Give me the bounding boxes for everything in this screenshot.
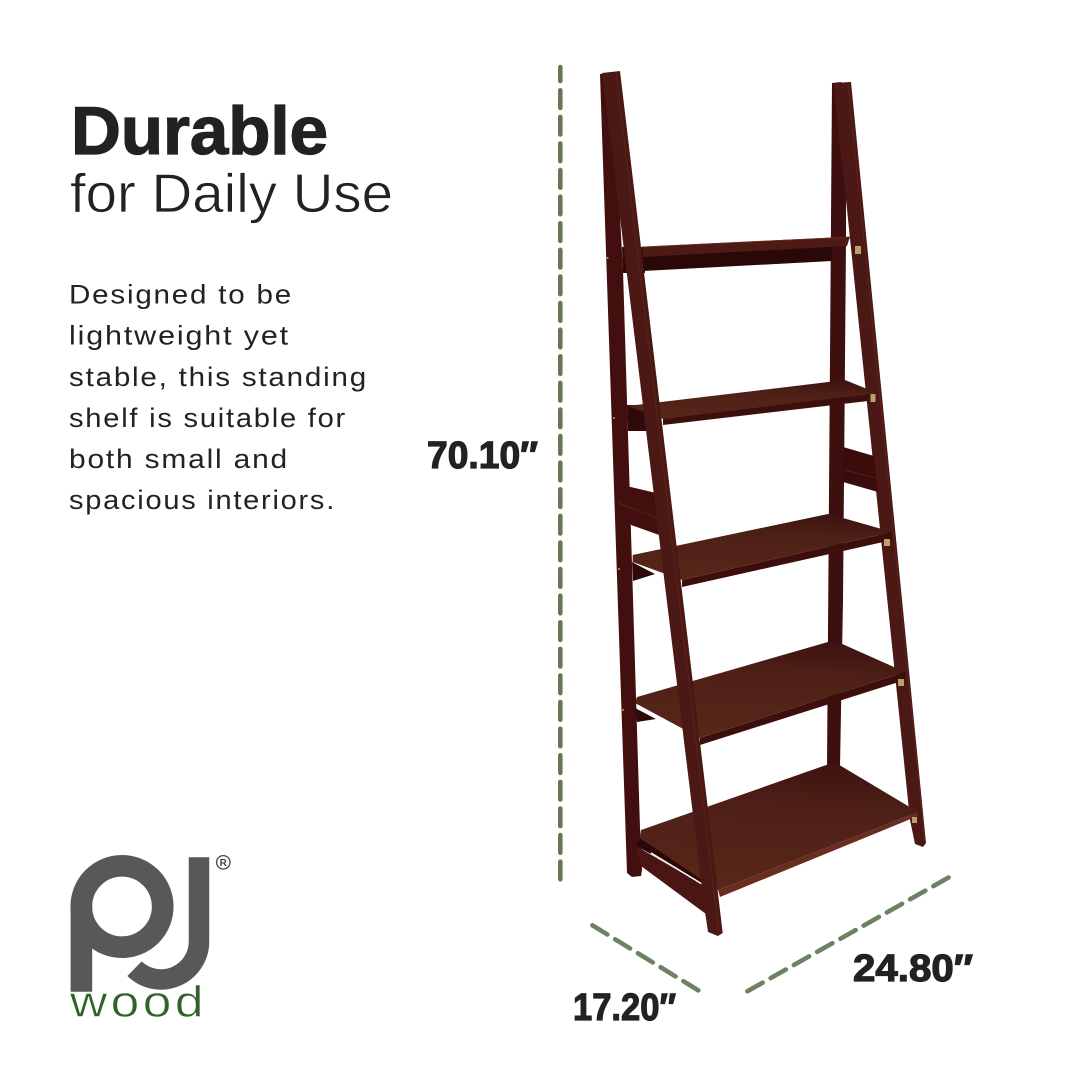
shelf 4: [635, 642, 905, 745]
depth dimension line: [592, 925, 699, 991]
description text block: spacious interiors.: [69, 485, 336, 515]
depth label: 17.20″: [573, 987, 676, 1029]
left upper brace: [622, 247, 645, 273]
description text block: [69, 280, 368, 515]
logo: letter p: [81, 866, 163, 992]
left back leg: [600, 73, 642, 877]
right back leg: [827, 82, 846, 767]
logo: registered mark: R: [220, 858, 228, 869]
gold brackets: [606, 246, 917, 823]
logo: letter j: [134, 857, 199, 979]
title: light line: for Daily Use: [70, 162, 393, 224]
width dimension line: [747, 877, 949, 991]
description text block: shelf is suitable for: [69, 403, 347, 433]
brand logo: [69, 856, 230, 1026]
width label: 24.80″: [853, 948, 973, 990]
title: bold line: Durable: [71, 93, 328, 169]
description text block: stable, this standing: [69, 362, 368, 392]
description text block: both small and: [69, 444, 289, 474]
right cross brace: [843, 447, 878, 492]
shelf 5: [636, 763, 918, 897]
height label: 70.10″: [427, 435, 538, 477]
left front rail: [602, 71, 723, 936]
description text block: lightweight yet: [69, 320, 290, 350]
shelf 1: [642, 237, 850, 271]
left second brace: [627, 405, 655, 431]
left brace under shelf 4: [635, 708, 656, 722]
shelf 3: [633, 514, 892, 587]
logo: registered mark: [217, 856, 230, 869]
description text block: Designed to be: [69, 280, 293, 310]
title: [70, 93, 393, 224]
ladder shelf product: [600, 71, 926, 936]
left third brace: [618, 484, 662, 536]
bottom side rail: [636, 846, 706, 914]
logo: wood wordmark: wood: [69, 978, 207, 1026]
shelf 2: [628, 380, 877, 425]
right front rail: [833, 82, 926, 847]
height dimension line: [558, 67, 563, 884]
left brace under shelf 3: [632, 562, 655, 581]
